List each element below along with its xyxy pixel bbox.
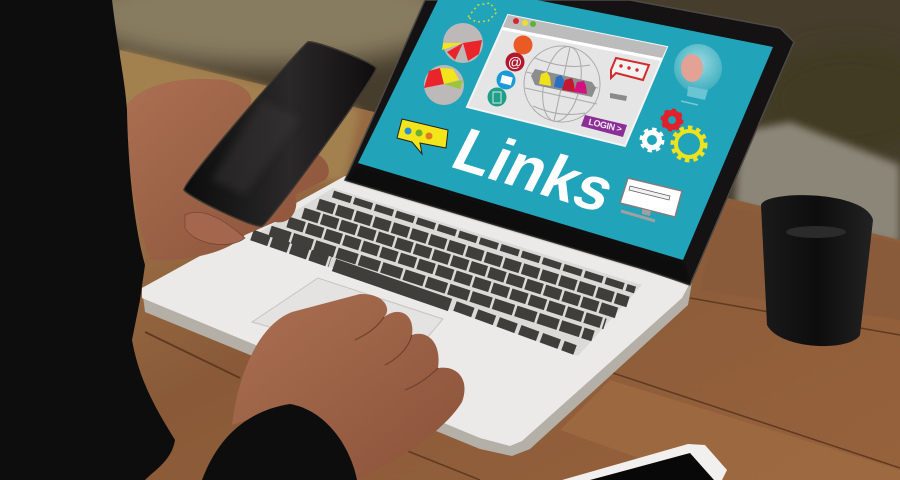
icon: search monitor xyxy=(620,178,682,221)
small link tag xyxy=(610,93,627,101)
login button: LOGIN > xyxy=(588,117,623,134)
phone xyxy=(184,42,376,226)
space bar xyxy=(334,265,450,305)
browser window xyxy=(467,15,667,146)
pie chart: bottom xyxy=(424,65,464,105)
dark hoodie xyxy=(0,0,175,480)
thumb under phone xyxy=(185,212,245,245)
window buttons xyxy=(513,18,536,27)
laptop lid and bezel xyxy=(345,0,794,285)
coffee cup xyxy=(761,195,873,346)
background: blurred garden xyxy=(0,0,900,260)
wooden table xyxy=(100,50,900,480)
globe xyxy=(524,43,600,125)
icon: yellow chat bubble xyxy=(397,119,448,154)
heading: Links: Links xyxy=(442,116,627,225)
red chat bubble xyxy=(611,58,649,80)
login button xyxy=(581,115,627,137)
contact icons xyxy=(488,36,532,106)
icon: white gear xyxy=(641,129,663,151)
screen xyxy=(358,0,773,260)
phone screen reflection xyxy=(212,100,300,195)
right hand on touchpad xyxy=(232,294,465,480)
icon: network dots xyxy=(468,3,497,22)
teal screen background xyxy=(358,0,773,260)
pie chart: top xyxy=(442,23,483,63)
finger creases xyxy=(355,317,438,390)
left hand holding phone xyxy=(127,79,329,260)
people bar xyxy=(531,69,596,97)
keyboard xyxy=(250,188,642,356)
laptop base xyxy=(142,176,692,456)
hoodie sleeve xyxy=(202,404,357,480)
touchpad xyxy=(252,278,443,352)
icon: light bulb with brain xyxy=(674,44,722,105)
hinge shadow xyxy=(345,165,690,285)
icon: red gear xyxy=(662,110,682,130)
contact icons: @ xyxy=(508,54,522,70)
tablet xyxy=(562,444,727,480)
laptop xyxy=(142,0,794,456)
icon: yellow gear xyxy=(672,128,706,160)
